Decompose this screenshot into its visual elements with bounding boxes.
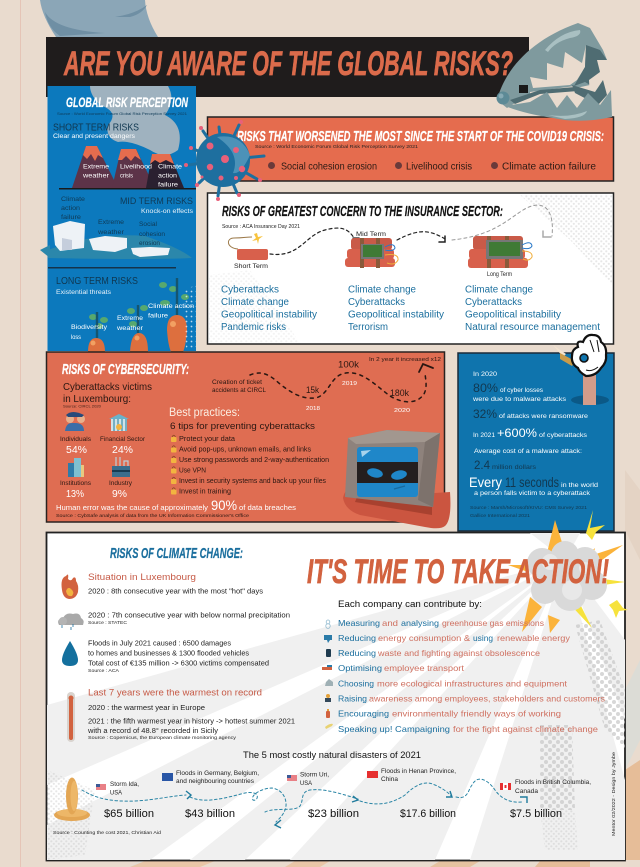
block: 2021 stats: of cyberattacks: [539, 432, 587, 439]
list: tips: [171, 434, 329, 496]
callout: human error: of data breaches: [239, 503, 296, 512]
labels: short term risks: weather: [82, 172, 110, 180]
callout: every 11 seconds: 11 seconds: [505, 474, 559, 490]
icon: financial sector: [109, 414, 129, 431]
list: company actions: employee transport: [384, 663, 465, 673]
labels: long term risks: weather: [116, 325, 144, 332]
list: tips: Invest in training: [179, 486, 231, 496]
list: company actions: awareness among employees, stakeholders and customers: [369, 694, 605, 704]
labels: mid term risks: Extreme: [98, 219, 124, 226]
icon: rain cloud: [58, 614, 84, 630]
list: mid term risks: Climate change: [348, 284, 416, 296]
label: long term: Long Term: [487, 271, 512, 278]
labels: ticket trend values: 180k: [390, 388, 409, 399]
stats: individuals and financial: [60, 436, 145, 456]
list: mid term risks: Geopolitical instability: [348, 310, 444, 320]
block: warmest years: [87, 705, 295, 740]
list: company actions: Speaking up! Campaigning: [338, 724, 450, 734]
labels: ticket trend values: [306, 357, 441, 414]
icon: shark trap: [496, 23, 612, 121]
panel: cybersecurity: [46, 352, 444, 522]
block: victims in Luxembourg: Cyberattacks victims: [63, 381, 152, 393]
block: victims in Luxembourg: in Luxembourg:: [63, 393, 131, 405]
disaster 4: Henan floods: $17.6 billion: [400, 808, 456, 820]
labels: mid term risks: action: [61, 205, 80, 212]
icon: virus: [184, 120, 264, 201]
icon: flame: [62, 575, 78, 599]
icon: carrots: [88, 278, 189, 352]
block: malware cost: Average cost of a malware attack:: [474, 448, 582, 455]
list: company actions: [338, 618, 605, 734]
source: cyber stats: Source : Marsh/Microsoft/KIVU: CMS Survey 2021: [470, 505, 587, 510]
block: floods: Source : ACA: [88, 668, 120, 673]
block: warmest years: with a record of 48.8° recorded in Sicily: [87, 727, 219, 735]
source: cyber stats: [470, 505, 587, 518]
subheading: long term: Existential threats: [56, 289, 111, 296]
list: tips: Avoid pop-ups, unknown emails, and links: [179, 444, 311, 454]
heading: climate change: RISKS OF CLIMATE CHANGE:: [110, 545, 243, 562]
panel: covid risks: [208, 117, 614, 181]
block: 2020 stats: In 2020: [473, 371, 497, 378]
labels: long term risks: Climate action: [148, 303, 194, 310]
list: mid term risks: Terrorism: [348, 322, 388, 333]
labels: short term risks: crisis: [120, 172, 133, 180]
icon: individuals: [65, 412, 85, 431]
list: company actions: Measuring: [338, 618, 380, 628]
icon: icebergs: [40, 221, 192, 259]
block: Luxembourg heat and rain: Source : STATEC: [88, 620, 128, 625]
title banner: [46, 37, 529, 97]
list: company actions: environmentally friendly ways of working: [392, 708, 561, 718]
icon: industry: [112, 457, 130, 477]
labels: long term risks: failure: [148, 312, 169, 320]
block: floods: to homes and businesses & 1300 flooded vehicles: [88, 650, 250, 658]
icon: masked monitor: [343, 430, 450, 528]
block: Luxembourg heat and rain: 2020 : 8th consecutive year with the most "hot" days: [88, 588, 264, 596]
subheading: short term: Clear and present dangers: [53, 133, 136, 140]
list: long term risks: Cyberattacks: [465, 297, 522, 308]
disaster 5: British Columbia floods: Floods in British Columbia,: [515, 780, 591, 786]
list: company actions: waste and fighting against obsolescence: [377, 648, 540, 658]
list: long term risks: Natural resource management: [465, 322, 600, 333]
callout: human error: Human error was the cause of approximately: [56, 503, 208, 512]
callout: every 11 seconds: in the world: [561, 482, 598, 489]
smoke: [90, 86, 180, 155]
disaster 5: British Columbia floods: Canada: [515, 789, 539, 795]
label: creation of ticket: [212, 379, 267, 394]
icon: thermometer: [67, 692, 75, 742]
disaster 2: European floods: $43 billion: [185, 808, 235, 820]
block: 2020 stats: of attacks were ransomware: [499, 413, 588, 420]
callout: every 11 seconds: a person falls victim to a cyberattack: [474, 490, 591, 497]
labels: ticket trend values: 100k: [338, 360, 359, 370]
subheading: each company: Each company can contribute by:: [338, 599, 482, 609]
source: risk perception: Source : World Economic Forum Global Risk Perception Survey 2021: [57, 112, 187, 116]
icon: explosion: [508, 510, 628, 633]
callout: every 11 seconds: Every: [469, 474, 502, 490]
icon: water drop: [62, 641, 78, 666]
credit: Mentor 02/2022 - Design by Jymbe: [611, 751, 616, 836]
panel: insurance sector: [208, 193, 614, 344]
list: company actions: renewable energy: [497, 633, 571, 643]
icon: institutions: [68, 458, 84, 477]
label: creation of ticket: accidents at CIRCL: [212, 387, 267, 394]
list: company actions: Choosing: [338, 678, 374, 688]
source: cybersecurity: Source : CybSafe analysis of data from the UK Information Commissioner's Office: [56, 513, 250, 518]
panel: cyber statistics: [458, 353, 614, 531]
list: long term risks: Climate change: [465, 284, 533, 296]
disaster 1: Storm Ida: Storm Ida,: [110, 781, 139, 788]
block: 2020 stats: [472, 371, 588, 421]
labels: long term risks: Biodiversity: [71, 324, 108, 331]
list: long term risks: [465, 284, 600, 333]
labels: mid term risks: MID TERM RISKS: [120, 196, 193, 207]
dashed timeline arrows: [270, 205, 552, 254]
stats: institutions and industry: 9%: [112, 489, 127, 500]
heading: long term: LONG TERM RISKS: [56, 276, 138, 287]
disaster 5: British Columbia floods: $7.5 billion: [510, 808, 562, 820]
list: covid bullets: Livelihood crisis: [406, 160, 472, 172]
block: 2020 stats: 32%: [473, 407, 497, 421]
disaster 2: European floods: Floods in Germany, Belgium,: [176, 770, 259, 777]
block: floods: Floods in July 2021 caused : 6500 damages: [88, 640, 232, 648]
disaster 3: Storm Uri: USA: [300, 780, 313, 787]
disaster 2: European floods: and neighbouring countries: [176, 778, 254, 785]
stats: individuals and financial: 54%: [66, 445, 87, 456]
list: tips: Use strong passwords and 2-way-authentication: [179, 455, 329, 464]
labels: mid term risks: failure: [61, 214, 82, 221]
disaster 3: Storm Uri: $23 billion: [308, 808, 359, 820]
list: company actions: using: [473, 633, 493, 643]
stats: individuals and financial: Financial Sector: [100, 436, 145, 443]
labels: long term risks: [71, 303, 194, 341]
labels: short term risks: action: [158, 172, 177, 180]
block: 2020 stats: of cyber losses: [500, 387, 543, 394]
labels: ticket trend values: 2020: [394, 408, 410, 414]
icon: volcanoes: [72, 146, 184, 188]
list: covid bullets: Climate action failure: [502, 160, 596, 172]
disaster 4: Henan floods: Floods in Henan Province,: [381, 769, 456, 775]
disaster 5: British Columbia floods: [500, 780, 591, 820]
stats: individuals and financial: Individuals: [60, 436, 91, 443]
labels: mid term risks: cohesion: [139, 231, 165, 238]
labels: mid term risks: Social: [139, 221, 157, 228]
list: long term risks: Geopolitical instability: [465, 310, 561, 320]
labels: short term risks: Climate: [158, 164, 182, 170]
source: disasters: Source : Counting the cost 2021, Christian Aid: [53, 830, 161, 836]
source: insurance: Source : ACA Insurance Day 2021: [222, 224, 300, 230]
list: company actions: more ecological infrastructures and equipment: [377, 678, 568, 688]
callout: human error: [56, 498, 296, 513]
disaster 2: European floods: [162, 770, 259, 820]
list: short term risks: [221, 284, 317, 333]
label: creation of ticket: Creation of ticket: [212, 379, 262, 386]
block: Luxembourg heat and rain: 2020 : 7th consecutive year with below normal precipitation: [88, 612, 290, 620]
icon: long term dynamite bundle: [468, 236, 532, 268]
label: mid term: Mid Term: [356, 231, 386, 238]
subheading: Luxembourg: Situation in Luxembourg: [88, 572, 196, 583]
block: warmest years: Source : Copernicus, the European climate monitoring agency: [88, 735, 237, 740]
disaster 3: Storm Uri: [287, 772, 359, 820]
block: Luxembourg heat and rain: [88, 588, 290, 625]
list: short term risks: Geopolitical instability: [221, 310, 317, 320]
heading: cybersecurity: RISKS OF CYBERSECURITY:: [62, 361, 189, 378]
labels: mid term risks: [61, 196, 193, 247]
icon: OK hand from hole: [553, 335, 609, 405]
list: company actions: Raising: [338, 694, 367, 704]
list: tips: Use VPN: [179, 466, 206, 474]
labels: short term risks: failure: [158, 182, 179, 188]
disaster 3: Storm Uri: Storm Uri,: [300, 772, 329, 778]
list: company actions: for the fight against climate change: [453, 724, 598, 734]
list: short term risks: Cyberattacks: [221, 284, 279, 296]
block: floods: Total cost of €135 million -> 6300 victims compensated: [88, 660, 269, 668]
block: 2021 stats: +600%: [497, 426, 537, 440]
heading: global risk perception: GLOBAL RISK PERCEPTION: [66, 94, 189, 110]
block: floods: [88, 640, 269, 673]
disaster 1: Storm Ida: $65 billion: [104, 808, 154, 820]
label: short term: Short Term: [234, 263, 268, 270]
list: company actions: analysing: [401, 618, 439, 628]
list: tips: Protect your data: [179, 434, 235, 443]
block: malware cost: [474, 448, 582, 472]
decorative grey smoke top left: [40, 0, 158, 37]
heading: short term: SHORT TERM RISKS: [53, 122, 139, 134]
subheading: tips: 6 tips for preventing cyberattacks: [170, 421, 315, 431]
stats: institutions and industry: 13%: [66, 489, 84, 500]
list: short term risks: Pandemic risks: [221, 322, 286, 333]
arrowheads: [186, 791, 527, 828]
icon: coin: [54, 778, 90, 821]
labels: mid term risks: weather: [97, 229, 125, 236]
disaster 4: Henan floods: [367, 769, 456, 820]
chart: dashed ticket trend: [250, 364, 433, 402]
stats: institutions and industry: [60, 480, 133, 500]
labels: short term risks: Extreme: [83, 164, 109, 170]
block: victims in Luxembourg: [63, 381, 152, 408]
list: company actions: Reducing: [338, 648, 376, 658]
source: cyber stats: Gallice International 2021: [470, 513, 530, 518]
list: mid term risks: Cyberattacks: [348, 297, 405, 308]
disaster 4: Henan floods: China: [381, 777, 399, 783]
block: malware cost: 2.4: [474, 458, 490, 472]
block: malware cost: million dollars: [492, 464, 536, 471]
list: short term risks: Climate change: [221, 297, 289, 308]
labels: short term risks: Livelihood: [120, 164, 152, 170]
stats: institutions and industry: Institutions: [60, 480, 91, 487]
block: 2020 stats: were due to malware attacks: [472, 396, 566, 403]
block: victims in Luxembourg: Source: CIRCL 2020: [63, 404, 101, 408]
list: company actions: Optimising: [338, 663, 382, 673]
block: 2021 stats: In 2021: [473, 432, 495, 439]
list: tips: Invest in security systems and back up your files: [179, 476, 326, 485]
heading: costly disasters: The 5 most costly natural disasters of 2021: [243, 750, 421, 760]
labels: ticket trend values: In 2 year it increased x12: [369, 357, 441, 363]
heading: best practices: Best practices:: [169, 407, 240, 419]
labels: short term risks: [82, 164, 182, 188]
icons: action list: [322, 620, 333, 729]
block: warmest years: 2020 : the warmest year in Europe: [88, 705, 205, 712]
panel: climate action: [46, 510, 628, 860]
halftone rays: [47, 620, 625, 860]
panel: global risk perception: [40, 86, 196, 352]
icon: short term dynamite: [228, 233, 268, 260]
icon: mid term dynamite bundle: [345, 238, 398, 268]
list: company actions: energy consumption &: [378, 633, 470, 643]
labels: ticket trend values: 15k: [306, 385, 319, 396]
list: company actions: Reducing: [338, 633, 376, 643]
sunburst rays: [47, 533, 625, 860]
stats: individuals and financial: 24%: [112, 445, 133, 456]
block: 2020 stats: 80%: [473, 381, 498, 395]
block: warmest years: 2021 : the fifth warmest year in history -> hottest summer 2021: [88, 718, 295, 726]
block: 2021 stats: [473, 426, 587, 440]
labels: long term risks: Extreme: [117, 315, 143, 322]
labels: mid term risks: Climate: [61, 196, 85, 203]
callout: every 11 seconds: [469, 474, 598, 497]
list: covid bullets: Social cohesion erosion: [281, 160, 377, 172]
subheading: warmest: Last 7 years were the warmest on record: [88, 688, 262, 698]
labels: mid term risks: Knock-on effects: [141, 208, 193, 215]
list: covid bullets: [268, 160, 596, 172]
source: covid: Source : World Economic Forum Global Risk Perception Survey 2021: [255, 144, 418, 149]
list: company actions: greenhouse gas emissions: [442, 618, 544, 628]
labels: ticket trend values: 2018: [306, 406, 320, 412]
disaster 1: Storm Ida: USA: [110, 790, 123, 796]
labels: long term risks: loss: [71, 334, 81, 341]
labels: ticket trend values: 2019: [342, 381, 357, 387]
list: company actions: Encouraging: [338, 708, 389, 718]
disaster 1: Storm Ida: [96, 781, 154, 820]
labels: mid term risks: erosion: [139, 240, 160, 247]
dashed route arrows: [82, 779, 522, 822]
callout: human error: 90%: [211, 498, 237, 513]
list: company actions: and: [382, 618, 398, 628]
stats: institutions and industry: Industry: [109, 480, 133, 487]
list: mid term risks: [348, 284, 444, 333]
